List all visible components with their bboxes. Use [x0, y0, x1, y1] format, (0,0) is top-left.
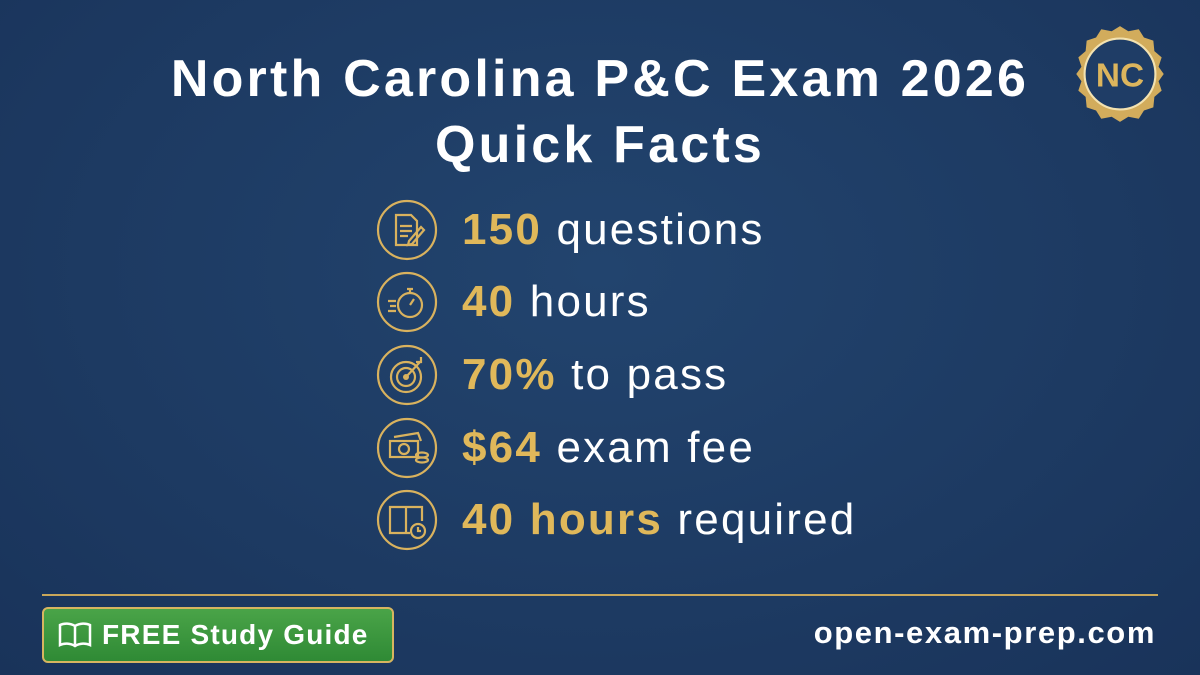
footer url: open-exam-prep.com: [814, 615, 1156, 650]
fact: pass rate: 70% to pass: [462, 350, 728, 399]
button: free study guide: FREE Study Guide: [102, 619, 369, 650]
fact: hours: [376, 272, 651, 332]
title: Quick Facts: [435, 116, 765, 174]
badge: NC: NC: [1096, 57, 1144, 95]
title: North Carolina P&C Exam 2026: [171, 50, 1029, 108]
fact: hours: 40 hours: [462, 277, 651, 326]
divider: [42, 594, 1158, 596]
fact: exam fee: [376, 418, 755, 478]
fact: questions: 150 questions: [462, 205, 765, 254]
fact: required hours: [376, 490, 856, 550]
title: [171, 50, 1029, 174]
fact: required hours: 40 hours required: [462, 495, 856, 544]
icon: book: [58, 622, 92, 648]
fact: questions: [376, 200, 765, 260]
button: free study guide: [42, 607, 394, 663]
fact: exam fee: $64 exam fee: [462, 423, 755, 472]
fact: pass rate: [376, 344, 728, 406]
badge: NC: [1076, 26, 1164, 122]
